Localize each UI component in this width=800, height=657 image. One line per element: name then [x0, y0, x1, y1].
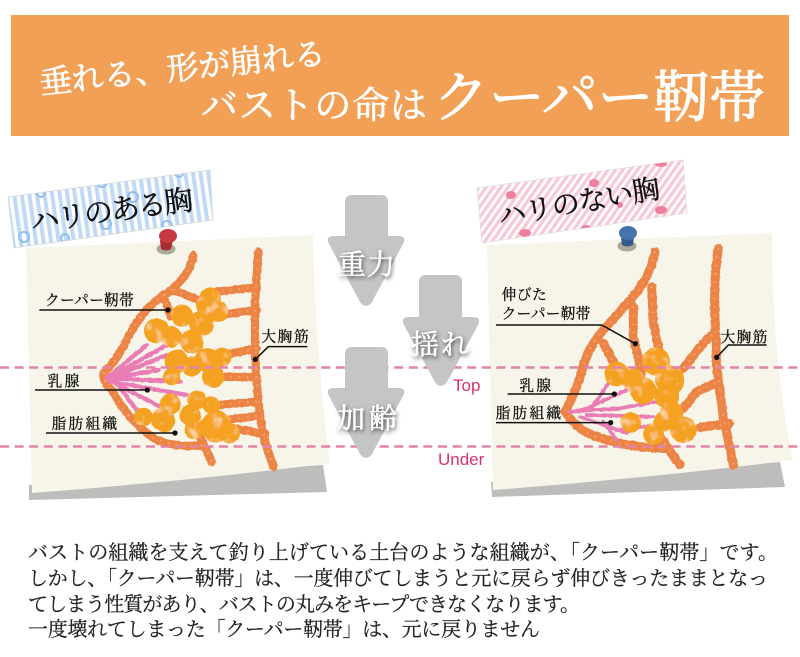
label: mammary gland: 乳腺 [519, 378, 551, 395]
arrow: shaking: 揺れ [411, 329, 469, 361]
fat tissue [604, 348, 697, 445]
panel: firm breast note [26, 235, 330, 500]
label: Under line: Under [438, 450, 485, 469]
icon: red pin [156, 229, 177, 254]
title banner [11, 15, 789, 136]
paper shadow [491, 462, 785, 497]
arrow: gravity: 重力 [338, 249, 395, 281]
diagram: firm breast anatomy [35, 252, 309, 467]
ligaments and pectoral muscle [103, 252, 273, 467]
body text: 一度壊れてしまった「クーパー靭帯」は、元に戻りません [28, 617, 540, 641]
paper [26, 235, 330, 493]
paper [487, 233, 793, 490]
label: mammary gland: 乳腺 [48, 373, 80, 390]
label: stretched ligament [496, 286, 638, 346]
arrow: gravity [328, 195, 404, 306]
label: fat tissue: 脂肪組織 [496, 404, 561, 422]
label: pectoral muscle: 大胸筋 [261, 328, 309, 345]
body text: バストの組織を支えて釣り上げている土台のような組織が、「クーパー靭帯」です。 [28, 541, 778, 564]
mammary glands [570, 383, 657, 440]
body text [28, 541, 778, 641]
label: ligament [39, 291, 171, 313]
tape heading: sagging breast [477, 160, 687, 243]
arrow: aging: 加齢 [337, 403, 397, 435]
label: fat tissue [46, 414, 178, 436]
label: stretched ligament: クーパー靭帯 [502, 304, 591, 322]
tape heading: firm breast [8, 169, 213, 248]
ligaments and pectoral muscle [565, 248, 733, 465]
label: Top line: Top [453, 376, 480, 395]
label: ligament: クーパー靭帯 [45, 291, 134, 309]
label: pectoral muscle: 大胸筋 [721, 329, 768, 346]
label: stretched ligament: 伸びた [502, 286, 547, 303]
title line 2: バストの命は [201, 85, 427, 127]
fat tissue [134, 287, 240, 443]
label: pectoral muscle [714, 329, 768, 360]
body text: てしまう性質があり、バストの丸みをキープできなくなります。 [28, 593, 580, 616]
icon: blue pin [618, 226, 637, 252]
label: fat tissue [496, 404, 613, 425]
arrow: aging [328, 347, 404, 458]
label: fat tissue: 脂肪組織 [52, 414, 117, 432]
body text: しかし、「クーパー靭帯」は、一度伸びてしまうと元に戻らず伸びきったままとなっ [28, 566, 768, 590]
arrow: shaking [403, 275, 479, 386]
panel: sagging breast note [487, 233, 793, 497]
tape heading: firm breast: ハリのある胸 [28, 183, 195, 239]
tape heading: sagging breast: ハリのない胸 [496, 173, 663, 233]
title line 1: 垂れる、形が崩れる [38, 35, 327, 101]
paper shadow [29, 465, 327, 500]
label: pectoral muscle [253, 328, 309, 362]
diagram: sagging breast anatomy [496, 248, 768, 465]
label: mammary gland [35, 373, 150, 393]
label: mammary gland [508, 378, 617, 397]
mammary glands [107, 345, 187, 410]
title emphasis: クーパー靭帯 [433, 68, 765, 130]
